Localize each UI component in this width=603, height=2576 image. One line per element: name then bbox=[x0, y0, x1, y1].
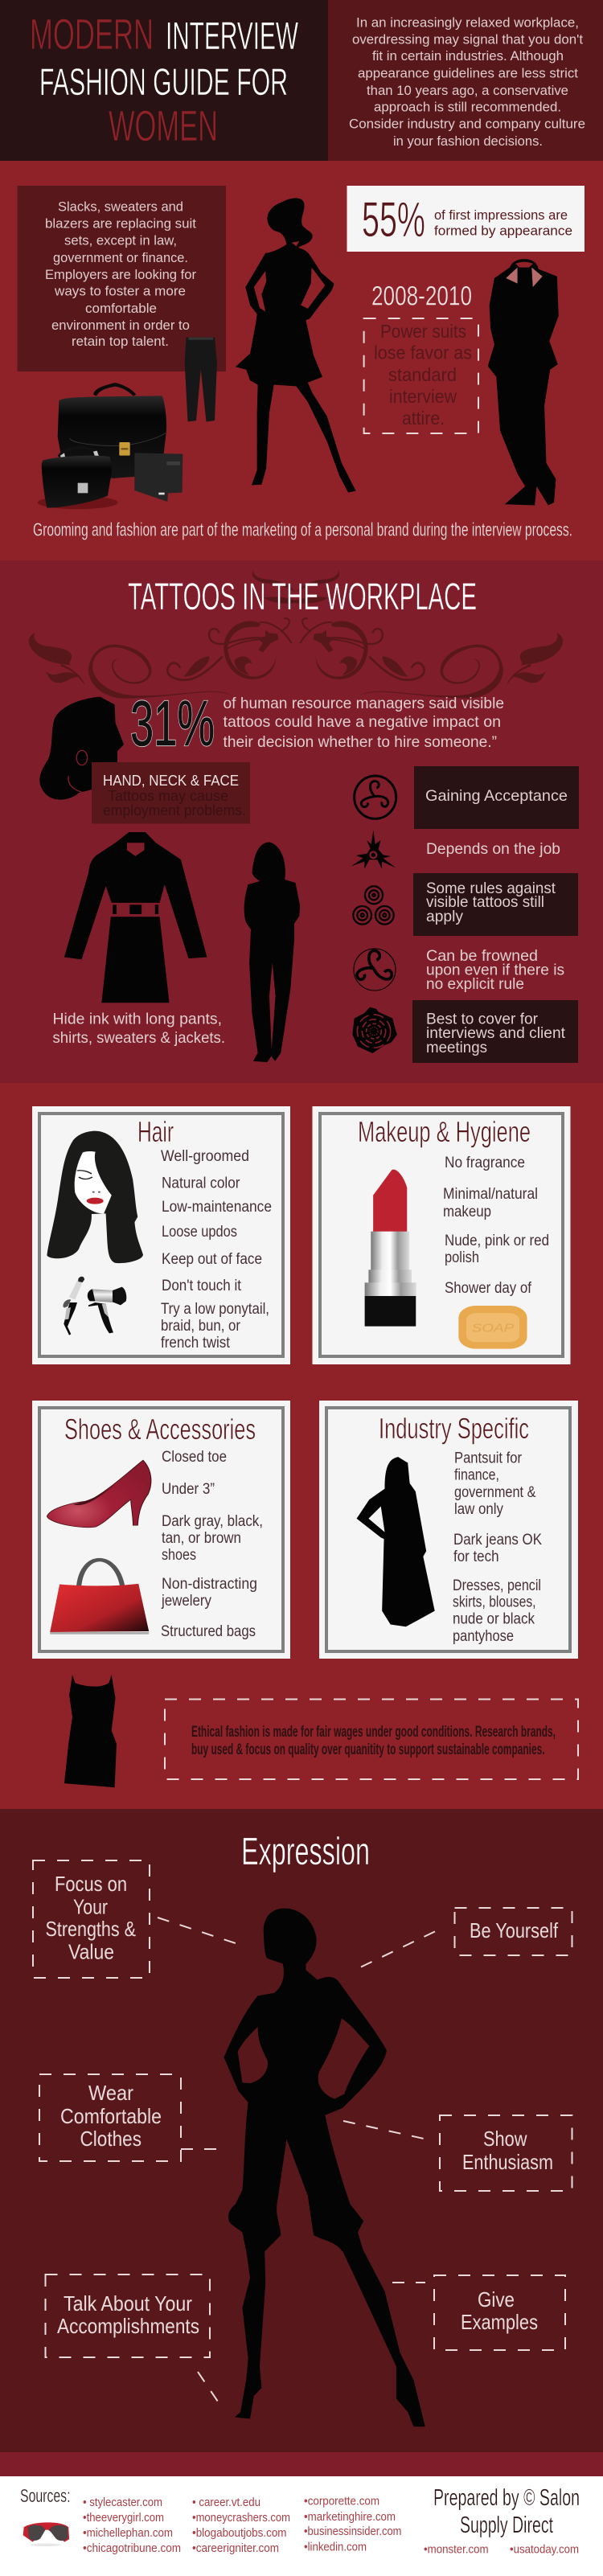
panel: some rules against: visible tattoos still bbox=[426, 893, 544, 911]
panel: intro paragraph: fit in certain industries. Although bbox=[372, 48, 564, 64]
panel: header title: MODERN bbox=[30, 10, 154, 59]
callout: 2008-2010 power suits: standard bbox=[388, 364, 457, 385]
panel: shoes and accessories: Shoes & Accessories bbox=[64, 1413, 256, 1446]
panel: hair: Try a low ponytail, bbox=[161, 1301, 269, 1318]
silhouette: woman with hands on hips bbox=[236, 198, 356, 492]
callout: wear comfortable clothes: Clothes bbox=[80, 2127, 142, 2151]
text: source list column 3: •linkedin.com bbox=[304, 2541, 367, 2554]
callout: hand, neck and face bbox=[92, 762, 250, 823]
icon: curling iron and hair dryer bbox=[63, 1277, 126, 1335]
caption: hide ink: Hide ink with long pants, bbox=[53, 1010, 222, 1028]
icon: triskele with spirals bbox=[354, 949, 396, 991]
panel: header title: INTERVIEW bbox=[166, 15, 298, 58]
panel: some rules against bbox=[413, 873, 578, 936]
panel: industry specific: Pantsuit for bbox=[454, 1450, 523, 1466]
callout: hand, neck and face: HAND, NECK & FACE bbox=[103, 772, 239, 789]
panel: slacks and blazers text: ways to foster a more bbox=[54, 283, 186, 299]
callout: 2008-2010 power suits: 2008-2010 bbox=[371, 281, 472, 312]
panel: intro paragraph bbox=[328, 0, 603, 161]
arrow: wear comfortable connector bbox=[181, 2148, 224, 2150]
callout: give examples: Examples bbox=[461, 2310, 538, 2334]
panel: shoes and accessories: tan, or brown bbox=[162, 1530, 241, 1547]
panel: hair: braid, bun, or bbox=[161, 1318, 241, 1335]
icon: woman with long hair bbox=[47, 1131, 143, 1263]
icon: lipstick bbox=[365, 1170, 416, 1327]
stat: 55 percent: formed by appearance bbox=[434, 224, 572, 238]
panel: intro paragraph: appearance guidelines are less strict bbox=[358, 66, 578, 80]
panel: industry specific: Industry Specific bbox=[379, 1412, 529, 1445]
panel: shoes and accessories: shoes bbox=[162, 1547, 196, 1564]
panel: slacks and blazers text: government or finance. bbox=[53, 250, 188, 265]
panel: makeup and hygiene: Makeup & Hygiene bbox=[358, 1115, 531, 1148]
icon: soap bbox=[458, 1306, 527, 1349]
panel: shoes and accessories: Closed toe bbox=[162, 1449, 227, 1466]
callout: hand, neck and face: Tattoos may cause bbox=[108, 788, 228, 804]
callout: wear comfortable clothes bbox=[39, 2074, 181, 2161]
silhouette: expression figure bbox=[224, 1909, 425, 2426]
stat: 31 percent: tattoos could have a negative impact on bbox=[224, 713, 501, 731]
heading: expression: Expression bbox=[241, 1831, 370, 1873]
stat: 31 percent: 31% bbox=[130, 687, 215, 759]
stat: 31 percent: their decision whether to hire someone.” bbox=[224, 733, 497, 751]
panel: slacks and blazers text bbox=[18, 186, 226, 371]
icon: rose tattoo bbox=[352, 1007, 397, 1053]
text: source list column 1: •michellephan.com bbox=[83, 2527, 173, 2540]
callout: give examples bbox=[434, 2275, 565, 2350]
text: source list column 2: • career.vt.edu bbox=[192, 2496, 260, 2509]
decorative flourish bbox=[29, 570, 563, 699]
text: prepared by credit: Supply Direct bbox=[460, 2512, 553, 2538]
panel: hair: Loose updos bbox=[162, 1224, 237, 1241]
arrow: show enthusiasm connector bbox=[343, 2121, 431, 2140]
callout: wear comfortable clothes: Wear bbox=[88, 2081, 133, 2105]
icon: sunglasses bbox=[23, 2522, 69, 2546]
callout: focus on your strengths: Value bbox=[68, 1940, 114, 1964]
panel: makeup and hygiene: Shower day of bbox=[445, 1280, 532, 1297]
panel: gaining acceptance: Gaining Acceptance bbox=[425, 787, 568, 805]
silhouette: standing woman bbox=[244, 842, 300, 1062]
panel: makeup and hygiene: polish bbox=[445, 1249, 479, 1266]
callout: hand, neck and face: employment problems. bbox=[103, 802, 246, 818]
panel: hair: Hair bbox=[137, 1115, 174, 1148]
callout: 2008-2010 power suits: lose favor as bbox=[374, 343, 472, 363]
icon: pants bbox=[185, 338, 217, 422]
icon: red high heel bbox=[47, 1460, 151, 1528]
callout: focus on your strengths: Focus on bbox=[55, 1872, 127, 1896]
panel: shoes and accessories: Non-distracting bbox=[162, 1576, 257, 1593]
icon: red handbag bbox=[50, 1560, 149, 1635]
panel: industry specific: for tech bbox=[453, 1548, 498, 1565]
text: depends on the job: Depends on the job bbox=[426, 840, 560, 858]
panel: slacks and blazers text: blazers are replacing suit bbox=[45, 215, 196, 232]
text: source list column 1: •chicagotribune.com bbox=[83, 2542, 181, 2555]
icon: triple spiral bbox=[353, 886, 394, 925]
callout: show enthusiasm: Show bbox=[483, 2127, 527, 2151]
panel: slacks and blazers text: Slacks, sweaters and bbox=[58, 199, 183, 214]
callout: be yourself: Be Yourself bbox=[470, 1918, 559, 1942]
icon: soap: SOAP bbox=[472, 1322, 514, 1335]
silhouette: woman profile head bbox=[39, 697, 124, 800]
panel: industry specific: finance, bbox=[454, 1466, 499, 1484]
panel: slacks and blazers text: sets, except in law, bbox=[64, 233, 177, 248]
panel: best to cover bbox=[412, 1000, 578, 1063]
callout: talk about accomplishments: Talk About Your bbox=[64, 2291, 192, 2316]
callout: focus on your strengths: Your bbox=[73, 1894, 108, 1918]
callout: 2008-2010 power suits bbox=[364, 281, 478, 433]
text: source list column 2: •careerigniter.com bbox=[192, 2542, 279, 2555]
panel: industry specific: government & bbox=[454, 1484, 536, 1501]
text: can be frowned upon: Can be frowned bbox=[426, 947, 538, 965]
text: source list column 1 bbox=[83, 2496, 181, 2555]
icon: triskele in circle bbox=[355, 776, 396, 818]
icon: briefcases and wallet bbox=[38, 383, 183, 509]
callout: focus on your strengths: Strengths & bbox=[45, 1917, 136, 1941]
stat: 31 percent: of human resource managers said visible bbox=[224, 695, 504, 712]
panel: makeup and hygiene bbox=[312, 1106, 571, 1364]
panel: intro paragraph: in your fashion decisions. bbox=[393, 133, 543, 149]
panel: best to cover: interviews and client bbox=[426, 1024, 566, 1042]
panel: makeup and hygiene: No fragrance bbox=[445, 1155, 525, 1171]
panel: shoes and accessories: Under 3” bbox=[162, 1481, 215, 1498]
caption: hide ink bbox=[53, 1010, 225, 1047]
text: source list column 2: •moneycrashers.com bbox=[192, 2512, 290, 2525]
panel: hair: french twist bbox=[161, 1335, 231, 1352]
text: source list column 3 bbox=[304, 2496, 402, 2554]
callout: ethical fashion bbox=[165, 1700, 578, 1779]
panel: makeup and hygiene: Minimal/natural bbox=[443, 1186, 538, 1203]
panel: industry specific bbox=[319, 1401, 578, 1659]
callout: 2008-2010 power suits: Power suits bbox=[380, 321, 466, 342]
callout: focus on your strengths bbox=[33, 1860, 150, 1978]
panel: hair: Natural color bbox=[162, 1175, 240, 1192]
text: can be frowned upon: upon even if there is bbox=[426, 962, 564, 979]
panel: intro paragraph: approach is still recommended. bbox=[374, 100, 561, 114]
panel: shoes and accessories bbox=[32, 1401, 290, 1659]
stat: 55 percent bbox=[347, 186, 585, 252]
callout: 2008-2010 power suits: attire. bbox=[402, 408, 445, 429]
panel: slacks and blazers text: Employers are looking for bbox=[45, 267, 196, 282]
panel: hair: Well-groomed bbox=[161, 1148, 249, 1165]
panel: intro paragraph: overdressing may signal that you don't bbox=[352, 32, 583, 47]
panel: shoes and accessories: Structured bags bbox=[161, 1623, 256, 1640]
stat: 31 percent bbox=[130, 687, 504, 759]
text: source list column 2 bbox=[192, 2496, 290, 2555]
silhouette: woman in suit bbox=[488, 259, 559, 506]
panel: header title bbox=[0, 0, 328, 161]
panel: hair: Don't touch it bbox=[162, 1278, 242, 1294]
callout: 2008-2010 power suits: interview bbox=[389, 386, 457, 407]
panel: shoes and accessories: jewelery bbox=[161, 1593, 211, 1610]
caption: hide ink: shirts, sweaters & jackets. bbox=[53, 1029, 225, 1047]
panel: hair: Keep out of face bbox=[162, 1251, 262, 1268]
callout: talk about accomplishments bbox=[45, 2275, 210, 2357]
heading: sources: Sources: bbox=[20, 2485, 71, 2506]
icon: coat bbox=[64, 832, 207, 1003]
panel: gaining acceptance bbox=[414, 766, 579, 829]
text: prepared by credit: •monster.com bbox=[424, 2544, 489, 2557]
panel: industry specific: nude or black bbox=[453, 1611, 535, 1627]
panel: industry specific: Dark jeans OK bbox=[453, 1532, 542, 1548]
text: source list column 2: •blogaboutjobs.com bbox=[192, 2527, 286, 2540]
panel: hair: Low-maintenance bbox=[162, 1199, 272, 1216]
arrow: give examples connector bbox=[392, 2282, 425, 2283]
text: source list column 3: •businessinsider.com bbox=[304, 2525, 402, 2538]
text: can be frowned upon: no explicit rule bbox=[426, 975, 524, 993]
panel: intro paragraph: than 10 years ago, a conservative bbox=[367, 83, 568, 98]
callout: show enthusiasm: Enthusiasm bbox=[462, 2150, 553, 2174]
panel: hair bbox=[32, 1106, 290, 1364]
panel: header title: FASHION GUIDE FOR bbox=[39, 60, 288, 103]
text: prepared by credit: •usatoday.com bbox=[510, 2544, 579, 2557]
text: source list column 1: • stylecaster.com bbox=[83, 2496, 162, 2509]
panel: intro paragraph: Consider industry and company culture bbox=[349, 116, 585, 132]
callout: talk about accomplishments: Accomplishments bbox=[57, 2314, 199, 2338]
panel: header title: WOMEN bbox=[109, 102, 218, 150]
stat: 55 percent: of first impressions are bbox=[434, 207, 568, 223]
callout: wear comfortable clothes: Comfortable bbox=[60, 2104, 162, 2128]
panel: industry specific: law only bbox=[454, 1501, 503, 1518]
panel: intro paragraph: In an increasingly relaxed workplace, bbox=[356, 14, 579, 31]
panel: makeup and hygiene: Nude, pink or red bbox=[445, 1233, 549, 1249]
panel: some rules against: apply bbox=[426, 908, 463, 925]
callout: show enthusiasm bbox=[440, 2115, 572, 2191]
panel: shoes and accessories: Dark gray, black, bbox=[162, 1513, 263, 1530]
text: source list column 3: •corporette.com bbox=[304, 2496, 379, 2508]
callout: give examples: Give bbox=[478, 2287, 515, 2311]
panel: industry specific: skirts, blouses, bbox=[453, 1594, 535, 1611]
panel: slacks and blazers text: environment in order to bbox=[51, 318, 190, 333]
silhouette: woman in long dress bbox=[357, 1457, 435, 1626]
text: prepared by credit bbox=[424, 2485, 580, 2557]
text: source list column 3: •marketinghire.com bbox=[304, 2511, 396, 2524]
panel: some rules against: Some rules against bbox=[426, 880, 556, 897]
panel: slacks and blazers text: comfortable bbox=[85, 301, 157, 316]
panel: industry specific: Dresses, pencil bbox=[453, 1577, 541, 1594]
panel: makeup and hygiene: makeup bbox=[443, 1204, 491, 1220]
panel: best to cover: Best to cover for bbox=[426, 1010, 538, 1028]
panel: best to cover: meetings bbox=[426, 1039, 487, 1056]
arrow: accomplishments connector bbox=[198, 2372, 221, 2406]
stat: 55 percent: 55% bbox=[362, 192, 425, 247]
arrow: be yourself connector bbox=[361, 1928, 442, 1967]
icon: winged star bbox=[351, 830, 396, 869]
stat: 31 percent: 31% bbox=[130, 687, 215, 759]
text: source list column 1: •theeverygirl.com bbox=[83, 2512, 164, 2525]
icon: little black dress bbox=[64, 1675, 117, 1787]
panel: slacks and blazers text: retain top talent. bbox=[72, 334, 169, 349]
callout: be yourself bbox=[455, 1908, 572, 1955]
arrow: focus on strengths connector bbox=[158, 1918, 243, 1946]
panel: industry specific: pantyhose bbox=[453, 1628, 514, 1645]
text: can be frowned upon bbox=[426, 947, 564, 993]
